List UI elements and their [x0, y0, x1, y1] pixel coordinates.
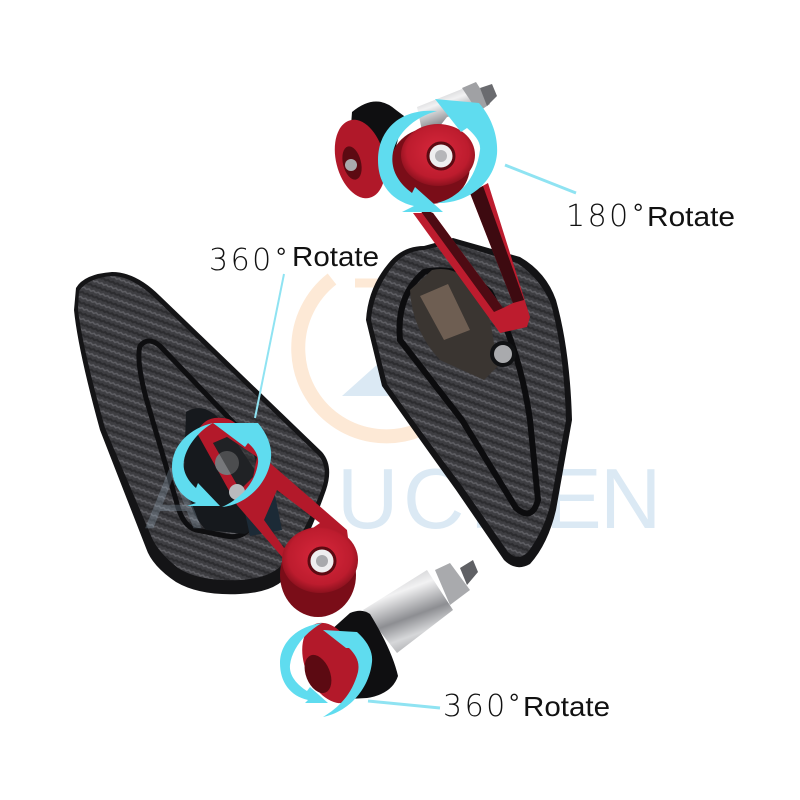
label: bottom 360 rotate: ° [509, 688, 519, 718]
label: bottom 360 rotate: 360 [443, 689, 508, 724]
right mirror [366, 238, 572, 567]
label: middle 360 rotate: 360 [209, 243, 274, 278]
inner recess [400, 270, 538, 513]
right chrome bolt [417, 82, 497, 145]
right red knob [390, 124, 475, 204]
left red knob [280, 527, 358, 617]
mount bracket [184, 408, 269, 534]
left mirror [74, 272, 329, 594]
icon: rotate arrows middle 360 [172, 423, 271, 507]
inner recess [139, 341, 260, 537]
label: middle 360 rotate: Rotate [292, 241, 379, 272]
callout line: 180 [505, 165, 576, 193]
watermark logo [145, 279, 661, 547]
callout line: bottom 360 [368, 701, 440, 708]
label: 180 rotate: Rotate [647, 201, 735, 232]
label: bottom 360 rotate [443, 688, 610, 724]
left red arm [197, 418, 352, 610]
icon: rotate arrows bottom 360 [280, 623, 372, 717]
label: 180 rotate: 180 [566, 199, 631, 234]
right red arm [413, 183, 530, 333]
left chrome bolt [363, 560, 478, 653]
right black and red end cap [327, 101, 404, 204]
label: middle 360 rotate [209, 241, 379, 278]
label: middle 360 rotate: ° [276, 242, 286, 272]
label: 180 rotate: ° [633, 198, 643, 228]
watermark over left mirror: A [145, 452, 202, 547]
mount bracket [410, 269, 498, 380]
icon: rotate arrows top 180 [378, 99, 497, 212]
callout line: middle 360 [255, 274, 284, 418]
left end cap [291, 611, 398, 712]
label: 180 rotate [566, 198, 735, 234]
label: bottom 360 rotate: Rotate [523, 691, 610, 722]
watermark logo: AOUCHEN [145, 452, 661, 547]
